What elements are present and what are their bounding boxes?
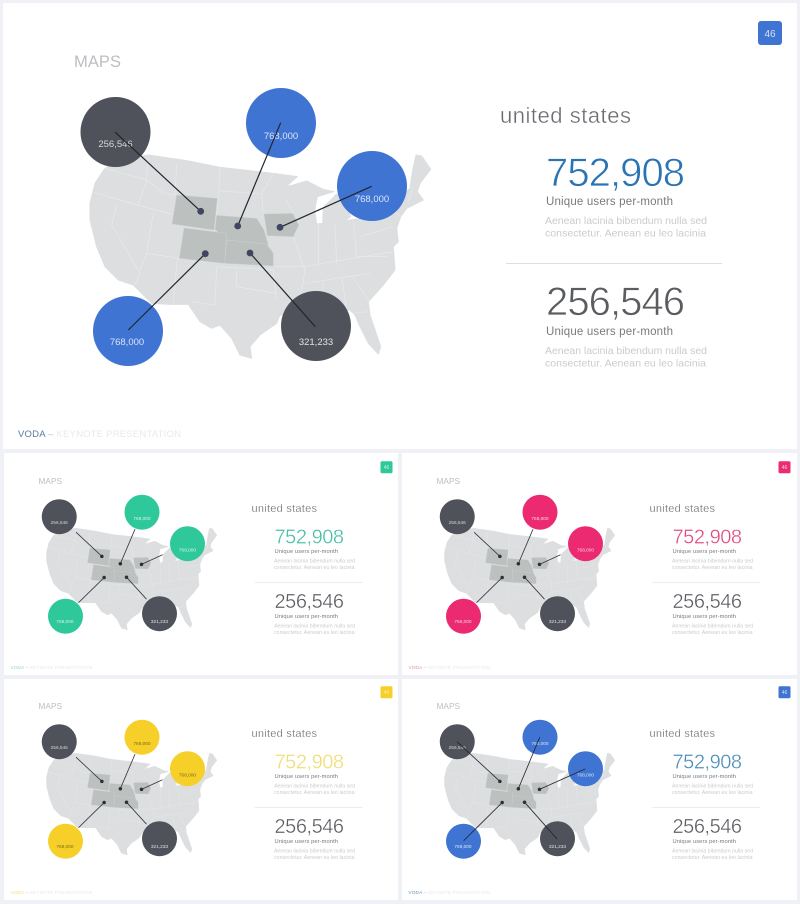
us map bbox=[444, 753, 615, 855]
us map bbox=[90, 155, 431, 358]
data circles: 256,546 bbox=[51, 745, 68, 751]
stat description: consectetur. Aenean eu leo lacinia bbox=[274, 855, 355, 861]
data circles: 768,000 bbox=[454, 619, 472, 625]
stat description: Aenean lacinia bibendum nulla sed bbox=[545, 345, 707, 357]
stat description: consectetur. Aenean eu leo lacinia bbox=[672, 790, 753, 796]
panel: main slide blue bbox=[3, 3, 797, 449]
us map bbox=[46, 528, 217, 630]
page badge: 46 bbox=[764, 29, 776, 40]
stat description bbox=[672, 784, 753, 796]
circle: east 768,000: 768,000 bbox=[355, 194, 389, 205]
stat description: consectetur. Aenean eu leo lacinia bbox=[274, 630, 355, 636]
stat label: Unique users per-month bbox=[274, 839, 338, 845]
stat description: consectetur. Aenean eu leo lacinia bbox=[545, 358, 706, 370]
stat description: Aenean lacinia bibendum nulla sed bbox=[672, 559, 753, 565]
stat description: Aenean lacinia bibendum nulla sed bbox=[274, 849, 355, 855]
data circles: 256,546 bbox=[51, 520, 68, 526]
heading: MAPS: MAPS bbox=[38, 702, 62, 711]
stat label: Unique users per-month bbox=[274, 614, 338, 620]
stat description: Aenean lacinia bibendum nulla sed bbox=[672, 624, 753, 630]
circle: south west 768,000: 768,000 bbox=[110, 337, 144, 348]
panel: pink slide bbox=[402, 453, 797, 675]
data circles: 768,000 bbox=[56, 844, 74, 850]
stat: 752,908: 752,908 bbox=[672, 752, 742, 774]
page badge: 46 bbox=[384, 465, 389, 471]
stat: 256,546: 256,546 bbox=[274, 816, 344, 838]
stat: 752,908: 752,908 bbox=[546, 151, 685, 195]
stat description: consectetur. Aenean eu leo lacinia bbox=[672, 630, 753, 636]
data circles: 768,000 bbox=[577, 773, 594, 779]
stat description bbox=[672, 849, 753, 861]
connector lines and dots bbox=[76, 529, 162, 603]
stat description: consectetur. Aenean eu leo lacinia bbox=[672, 565, 753, 571]
stat: 752,908: 752,908 bbox=[274, 752, 344, 774]
data circles: 768,000 bbox=[454, 844, 472, 850]
stat: 256,546: 256,546 bbox=[672, 591, 742, 613]
page badge bbox=[778, 686, 790, 698]
data circles: 768,000 bbox=[179, 773, 196, 779]
stat description: consectetur. Aenean eu leo lacinia bbox=[672, 855, 753, 861]
stat: 256,546: 256,546 bbox=[672, 816, 742, 838]
stat description: consectetur. Aenean eu leo lacinia bbox=[274, 790, 355, 796]
heading: united states: united states bbox=[252, 728, 318, 740]
footer: VODA – KEYNOTE PRESENTATION bbox=[408, 665, 491, 671]
connector lines and dots bbox=[474, 529, 560, 603]
circle: south 321,233 bbox=[281, 291, 351, 361]
heading: united states: united states bbox=[650, 728, 716, 740]
data circles bbox=[42, 720, 205, 859]
stat description bbox=[545, 345, 707, 370]
footer: VODA – KEYNOTE PRESENTATION bbox=[18, 429, 181, 440]
data circles: 321,233 bbox=[151, 844, 168, 850]
stat description bbox=[274, 559, 355, 571]
data circles: 768,000 bbox=[577, 548, 594, 554]
stat: 256,546: 256,546 bbox=[274, 591, 344, 613]
circle: north west 256,546 bbox=[80, 97, 150, 167]
connector lines and dots bbox=[76, 754, 162, 828]
stat: 256,546: 256,546 bbox=[546, 280, 685, 324]
stat description bbox=[274, 624, 355, 636]
page badge: 46 bbox=[782, 690, 787, 696]
stat label: Unique users per-month bbox=[672, 614, 736, 620]
footer: VODA – KEYNOTE PRESENTATION bbox=[408, 890, 491, 896]
stat label: Unique users per-month bbox=[672, 839, 736, 845]
stat description: Aenean lacinia bibendum nulla sed bbox=[672, 849, 753, 855]
stat description bbox=[672, 624, 753, 636]
data circles: 321,233 bbox=[151, 619, 168, 625]
page badge bbox=[758, 21, 782, 45]
circle: north 768,000: 768,000 bbox=[264, 131, 298, 142]
page badge: 46 bbox=[782, 465, 787, 471]
panel: green slide bbox=[4, 453, 398, 675]
circle: south west 768,000 bbox=[93, 296, 163, 366]
data circles: 321,233 bbox=[549, 844, 566, 850]
heading: united states: united states bbox=[500, 103, 631, 128]
stat description: Aenean lacinia bibendum nulla sed bbox=[274, 559, 355, 565]
stat description bbox=[672, 559, 753, 571]
heading: united states: united states bbox=[252, 503, 318, 515]
stat description: Aenean lacinia bibendum nulla sed bbox=[274, 624, 355, 630]
stat description bbox=[545, 215, 707, 240]
circle: north west 256,546: 256,546 bbox=[98, 139, 133, 150]
heading: MAPS: MAPS bbox=[38, 477, 62, 486]
stat description bbox=[274, 849, 355, 861]
data circles bbox=[440, 720, 603, 859]
stat description bbox=[274, 784, 355, 796]
page badge: 46 bbox=[384, 690, 389, 696]
us map bbox=[46, 753, 217, 855]
stat description: Aenean lacinia bibendum nulla sed bbox=[672, 784, 753, 790]
data circles: 768,000 bbox=[531, 516, 549, 522]
data circles bbox=[42, 495, 205, 634]
connector lines and dots bbox=[457, 737, 585, 841]
circle: east 768,000 bbox=[337, 151, 407, 221]
data circles: 768,000 bbox=[179, 548, 196, 554]
stat description: Aenean lacinia bibendum nulla sed bbox=[274, 784, 355, 790]
footer: VODA – KEYNOTE PRESENTATION bbox=[10, 890, 93, 896]
data circles: 768,000 bbox=[531, 741, 549, 747]
data circles: 256,546 bbox=[449, 745, 466, 751]
data circles: 768,000 bbox=[133, 516, 151, 522]
panel: yellow slide bbox=[4, 679, 398, 900]
stat description: consectetur. Aenean eu leo lacinia bbox=[274, 565, 355, 571]
stat description: consectetur. Aenean eu leo lacinia bbox=[545, 228, 706, 240]
data circles: 321,233 bbox=[549, 619, 566, 625]
circle: north 768,000 bbox=[246, 88, 316, 158]
page badge bbox=[778, 461, 790, 473]
heading: MAPS: MAPS bbox=[436, 477, 460, 486]
stat: 752,908: 752,908 bbox=[672, 527, 742, 549]
circle: south 321,233: 321,233 bbox=[299, 337, 333, 348]
us map bbox=[444, 528, 615, 630]
heading: MAPS: MAPS bbox=[436, 702, 460, 711]
stat label: Unique users per-month bbox=[274, 549, 338, 555]
stat label: Unique users per-month bbox=[546, 196, 673, 208]
heading: MAPS: MAPS bbox=[74, 53, 121, 71]
stat label: Unique users per-month bbox=[274, 774, 338, 780]
connector lines and dots bbox=[115, 123, 372, 330]
stat label: Unique users per-month bbox=[672, 774, 736, 780]
stat label: Unique users per-month bbox=[672, 549, 736, 555]
panel: blue slide small bbox=[402, 679, 797, 900]
stat description: Aenean lacinia bibendum nulla sed bbox=[545, 215, 707, 227]
stat label: Unique users per-month bbox=[546, 326, 673, 338]
stat: 752,908: 752,908 bbox=[274, 527, 344, 549]
page badge bbox=[380, 461, 392, 473]
data circles: 768,000 bbox=[133, 741, 151, 747]
heading: united states: united states bbox=[650, 503, 716, 515]
data circles: 768,000 bbox=[56, 619, 74, 625]
footer: VODA – KEYNOTE PRESENTATION bbox=[10, 665, 93, 671]
page badge bbox=[380, 686, 392, 698]
data circles: 256,546 bbox=[449, 520, 466, 526]
data circles bbox=[440, 495, 603, 634]
